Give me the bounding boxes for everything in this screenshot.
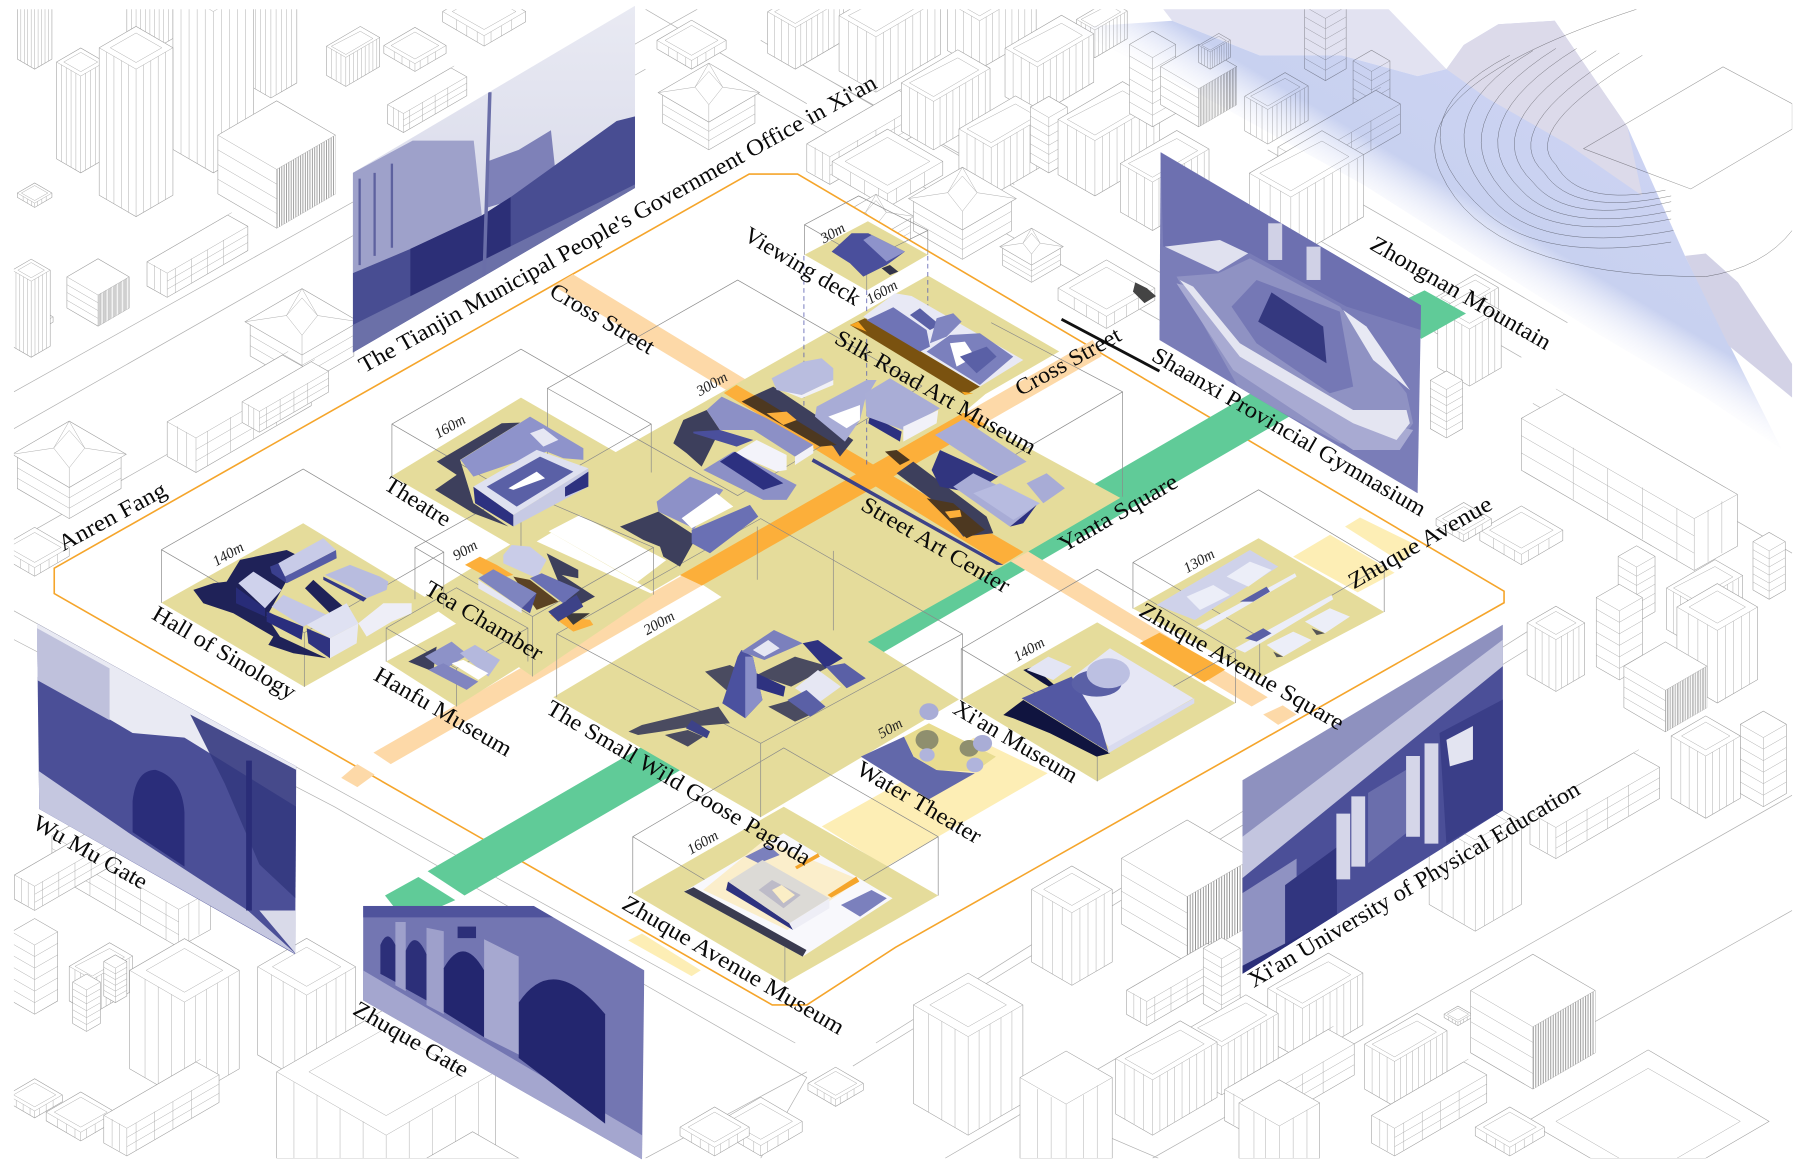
plot: Xi'an Museum xyxy=(961,622,1236,781)
building: Water Theater xyxy=(861,703,996,799)
street: Zhuque Avenue light yellow xyxy=(628,517,1416,976)
stadium running track xyxy=(1435,9,1792,277)
south roof stub xyxy=(426,1132,519,1158)
building: Small Wild Goose Pagoda xyxy=(628,630,866,747)
crossing: southwest to northeast xyxy=(680,413,985,585)
label: Xi'an University of Physical Education: Xi'an University of Physical Education xyxy=(1243,776,1585,992)
height: Xi'an Museum 140m: 140m xyxy=(1011,635,1048,665)
building: Viewing deck and Silk Road Art Museum xyxy=(832,233,1023,395)
street: green south segment xyxy=(385,877,455,922)
plot: Theatre xyxy=(392,398,651,551)
label: Cross Street north: Cross Street xyxy=(546,278,660,360)
height: Theatre 160m: 160m xyxy=(432,412,469,442)
plot: viewing deck xyxy=(804,221,928,290)
plots: yellow building sites xyxy=(161,221,1384,983)
large southeast hall roof inset xyxy=(1556,1068,1740,1158)
height: Tea Chamber 90m: 90m xyxy=(450,537,481,564)
large south tower edges xyxy=(277,1028,496,1158)
street: peach patches xyxy=(341,705,1297,787)
label: Theatre: Theatre xyxy=(380,471,456,532)
label: Yanta Square: Yanta Square xyxy=(1054,469,1182,557)
label: Zhongnan Mountain: Zhongnan Mountain xyxy=(1366,231,1556,355)
crossing: Xi'an Museum corner xyxy=(1140,633,1225,682)
orange street crossings xyxy=(680,385,1225,682)
label: Xi'an Museum: Xi'an Museum xyxy=(949,695,1083,788)
label: The Small Wild Goose Pagoda: The Small Wild Goose Pagoda xyxy=(542,695,815,870)
plot: Zhuque Avenue Museum xyxy=(633,807,938,983)
building: Zhuque Avenue Square pavilions xyxy=(1157,550,1350,657)
building: Hanfu Museum xyxy=(408,642,500,690)
label: Silk Road Art Museum: Silk Road Art Museum xyxy=(831,325,1041,460)
height: Water Theater 50m: 50m xyxy=(875,715,906,742)
label: Hanfu Museum: Hanfu Museum xyxy=(370,662,517,761)
building: Theatre xyxy=(435,417,588,527)
street: Yanta Square green axis xyxy=(428,377,1314,895)
label: Zhuque Avenue Museum: Zhuque Avenue Museum xyxy=(618,890,849,1040)
white gap in the central plots xyxy=(549,515,666,582)
plot: Hanfu Museum xyxy=(386,623,528,706)
southern block edges xyxy=(1239,1103,1320,1158)
label: Hall of Sinology: Hall of Sinology xyxy=(148,601,301,705)
label: Cross Street east: Cross Street xyxy=(1011,322,1126,401)
panel: project site base and boundary xyxy=(54,174,1504,1005)
building: Xi'an Museum xyxy=(1003,648,1194,757)
label: Zhuque Avenue: Zhuque Avenue xyxy=(1344,491,1496,594)
height: Hall of Sinology 140m: 140m xyxy=(210,539,247,570)
building: Tea Chamber xyxy=(465,545,595,632)
dark gate block xyxy=(1133,282,1156,303)
pole xyxy=(484,92,490,277)
deep wall panel xyxy=(410,197,510,296)
photo: Shaanxi Provincial Gymnasium xyxy=(1153,147,1427,500)
left building xyxy=(353,141,482,273)
plot: Tea Chamber xyxy=(421,536,654,677)
wireframe height boxes xyxy=(161,196,1384,983)
height: Pagoda 200m: 200m xyxy=(641,608,678,639)
streets on the site xyxy=(341,274,1466,976)
label: Tea Chamber: Tea Chamber xyxy=(420,576,548,666)
label: Water Theater: Water Theater xyxy=(852,756,986,849)
label: Tianjin office: The Tianjin Municipal People's Government Office in Xi'an xyxy=(355,70,881,378)
plot: Zhuque Avenue Square xyxy=(1133,538,1384,678)
height: Square 130m: 130m xyxy=(1181,546,1218,577)
southern tower edges xyxy=(1020,1078,1112,1158)
dashed viewing-deck guide lines xyxy=(804,256,928,467)
label: Anren Fang: Anren Fang xyxy=(54,477,171,556)
height: Silk Road 160m: 160m xyxy=(864,277,901,308)
building: central courtyard halls and Street Art Center xyxy=(620,358,1065,567)
height: viewing deck 30m: 30m xyxy=(817,220,848,248)
large south tower xyxy=(277,1008,496,1158)
label: Street Art Center: Street Art Center xyxy=(857,492,1015,598)
labels xyxy=(29,70,1585,1082)
label: Zhuque Gate: Zhuque Gate xyxy=(349,996,473,1082)
crossing: northwest to southeast xyxy=(724,385,1023,565)
photo: Zhuque Gate xyxy=(360,904,648,1159)
label: Viewing deck: Viewing deck xyxy=(740,222,866,311)
height: Zhuque Museum 160m: 160m xyxy=(685,828,722,858)
height: central 300m: 300m xyxy=(693,369,731,400)
Zhongnan Mountain watercolor wash xyxy=(1102,9,1792,426)
building: Hall of Sinology xyxy=(193,538,412,658)
photo: Wu Mu Gate xyxy=(35,622,300,962)
street: Cross Street southwest to northeast xyxy=(373,340,1102,764)
ground strip xyxy=(353,184,635,353)
plot: central courtyard, Silk Road, Street Art and Pagoda xyxy=(549,275,1120,817)
photo: Xi'an University of Physical Education xyxy=(1239,622,1506,977)
southern tower xyxy=(1020,1051,1112,1158)
southern block xyxy=(1239,1080,1320,1158)
photo: Tianjin Government Office xyxy=(353,6,635,353)
dark gate bar xyxy=(1061,319,1159,371)
label: Shaanxi Provincial Gymnasium: Shaanxi Provincial Gymnasium xyxy=(1148,342,1431,521)
label: Wu Mu Gate: Wu Mu Gate xyxy=(29,810,152,894)
windows xyxy=(360,164,392,265)
building: Zhuque Avenue Museum xyxy=(684,833,893,957)
street: Cross Street northwest to southeast xyxy=(553,274,1268,706)
dark wall xyxy=(353,116,635,353)
plot: Hall of Sinology xyxy=(161,523,444,687)
distant buildings xyxy=(488,130,556,207)
stadium field xyxy=(1584,67,1792,189)
label: Zhuque Avenue Square: Zhuque Avenue Square xyxy=(1135,597,1349,735)
large southeast hall xyxy=(1527,1050,1769,1158)
street: green Zhongnan patch xyxy=(1400,290,1466,339)
